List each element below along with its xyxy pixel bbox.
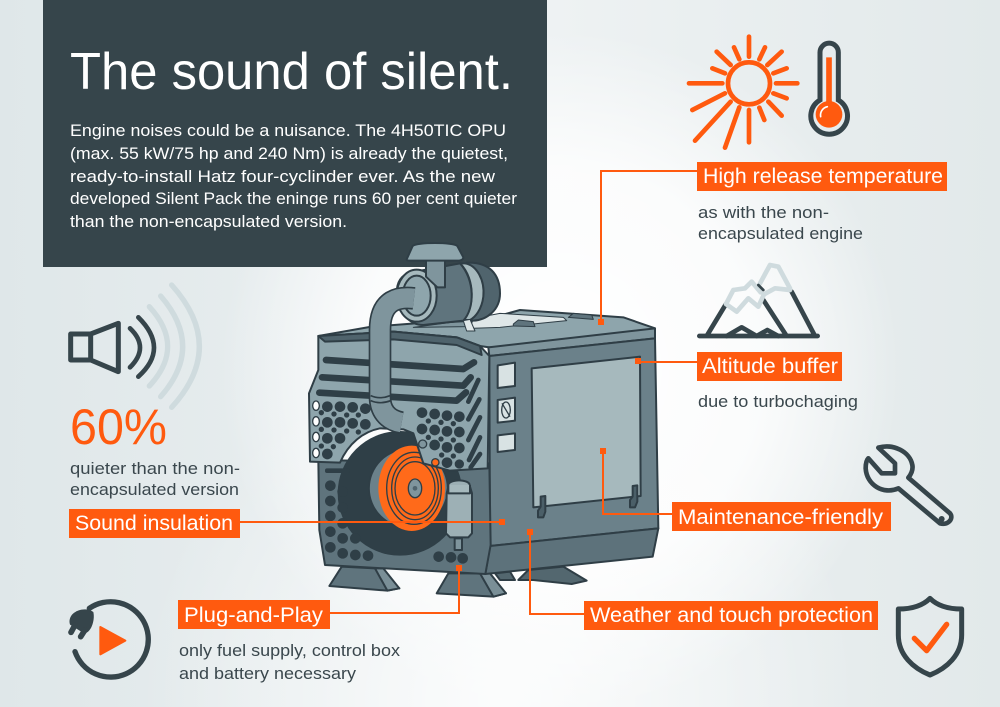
callout line: altitude buffer [638, 361, 697, 363]
engine illustration [309, 243, 658, 597]
title panel [43, 0, 547, 267]
intro paragraph: ready-to-install Hatz four-cyclinder ever. As the new [70, 168, 495, 186]
intro paragraph: Engine noises could be a nuisance. The 4H50TIC OPU [70, 122, 506, 140]
text: only fuel supply, control box and battery necessary: and battery necessary [179, 665, 357, 683]
text: as with the non-encapsulated engine: as with the non- [698, 204, 829, 222]
callout line: plug-and-play [330, 568, 459, 613]
text: as with the non-encapsulated engine: encapsulated engine [698, 225, 863, 243]
text: only fuel supply, control box and battery necessary: only fuel supply, control box [179, 642, 401, 660]
label: plug-and-play: Plug-and-Play [184, 604, 324, 627]
callout dot: plug-and-play [456, 565, 462, 571]
icon: mountain [699, 265, 818, 336]
callout line: maintenance-friendly [603, 451, 672, 514]
icon: thermometer [811, 43, 847, 134]
engine front housing [318, 431, 491, 574]
callout dot: altitude buffer [635, 358, 641, 364]
text: only fuel supply, control box and battery necessary [179, 642, 401, 683]
icon: plug and play [69, 602, 148, 677]
engine side panel [485, 338, 658, 574]
text: as with the non-encapsulated engine [698, 204, 863, 243]
fuel filter [446, 480, 472, 550]
callout line: sound insulation [240, 521, 502, 523]
icon: wrench [866, 447, 951, 524]
callout dot: sound insulation [499, 519, 505, 525]
label: maintenance-friendly: Maintenance-friendly [678, 506, 884, 529]
icon: speaker [71, 285, 199, 407]
callout dot: high release temperature [598, 319, 604, 325]
text: due to turbochaging: due to turbochaging [698, 393, 858, 411]
intro paragraph: (max. 55 kW/75 hp and 240 Nm) is already the quietest, [70, 145, 508, 163]
engine top cover [318, 310, 655, 356]
air filter and intake pipe [371, 243, 500, 423]
callout line: weather and touch protection [530, 532, 584, 614]
orange flywheel [378, 446, 445, 531]
label: sound insulation: Sound insulation [75, 512, 233, 535]
text: quieter than the non-encapsulated version [70, 460, 240, 499]
text: quieter than the non-encapsulated version: encapsulated version [70, 481, 239, 499]
engine front grille [309, 332, 489, 471]
statistic: 60%: 60% [70, 399, 167, 455]
icon: sun [689, 37, 797, 148]
label: weather and touch protection: Weather and touch protection [590, 604, 873, 627]
engine feet [329, 567, 587, 597]
icon: shield with check [898, 598, 962, 675]
callout line: high release temperature [601, 171, 697, 321]
title: The sound of silent. [70, 43, 513, 101]
intro paragraph [70, 122, 518, 231]
intro paragraph: developed Silent Pack the eninge runs 60 per cent quieter [70, 190, 518, 208]
label: high release temperature: High release temperature [703, 165, 943, 188]
intro paragraph: than the non-encapsulated version. [70, 213, 347, 231]
callout dot: maintenance-friendly [600, 448, 606, 454]
text: quieter than the non-encapsulated version: quieter than the non- [70, 460, 240, 478]
label: altitude buffer: Altitude buffer [702, 355, 838, 378]
label: plug-and-play [178, 600, 330, 629]
callout dot: weather and touch protection [527, 529, 533, 535]
